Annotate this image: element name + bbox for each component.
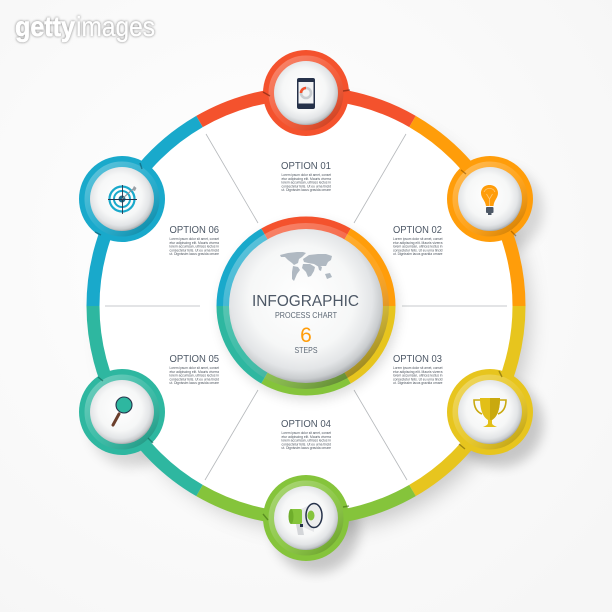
text block: option 02: consectetur felis. Ut eu urna tincid: [393, 248, 442, 252]
text block: option 05: Lorem ipsum dolor sit amet, conset: [170, 366, 219, 370]
text block: option 02: etur adipiscing elit. Mauris viverra: [393, 241, 443, 245]
hub segment: green: [265, 377, 347, 389]
text block: option 06: consectetur felis. Ut eu urna tincid: [170, 248, 219, 252]
ring segment: blue: [93, 122, 200, 306]
text block: option 02: lorem accumsan, ultrices lectus in: [393, 245, 442, 249]
number 6: 6: [300, 324, 312, 347]
icon: target: [108, 185, 137, 214]
text block: option 03: ut. Dignissim lacus gravida ornare: [393, 381, 442, 385]
text block: option 04: ut. Dignissim lacus gravida ornare: [282, 446, 331, 450]
text block: option 05: etur adipiscing elit. Mauris viverra: [170, 370, 219, 374]
drop shadow of the main circle: [89, 105, 543, 573]
central hub: [220, 222, 398, 400]
node 06: target: [79, 156, 165, 242]
icon: magnifying glass: [113, 397, 132, 425]
hub segment: red: [265, 223, 347, 235]
ring segment: orange: [412, 122, 519, 306]
text block: option 04: [281, 418, 331, 450]
text block: option 06: lorem accumsan, ultrices lectus in: [170, 245, 219, 249]
text block: option 01: etur adipiscing elit. Mauris viverra: [282, 177, 331, 181]
node 01: smartphone: [263, 50, 350, 136]
text block: option 05: OPTION 05: [170, 353, 219, 365]
text block: option 03: OPTION 03: [393, 353, 442, 365]
world map icon: [280, 252, 332, 281]
text block: option 05: consectetur felis. Ut eu urna tincid: [170, 377, 219, 381]
text block: option 03: lorem accumsan, ultrices lectus in: [393, 374, 442, 378]
watermark logo: getty: [15, 11, 75, 42]
text block: option 03: etur adipiscing elit. Mauris viverra: [393, 370, 443, 374]
icon: light bulb: [481, 185, 498, 215]
text block: option 02: OPTION 02: [393, 224, 442, 236]
node 03: trophy: [447, 369, 533, 455]
text block: option 01: [281, 160, 331, 192]
title: INFOGRAPHIC: INFOGRAPHIC: [252, 293, 359, 310]
text block: option 04: etur adipiscing elit. Mauris viverra: [282, 435, 331, 439]
hub segment: orange: [347, 235, 388, 306]
text block: option 02: Lorem ipsum dolor sit amet, conset: [393, 237, 442, 241]
hub segment: teal: [224, 306, 265, 377]
node 02: light bulb: [447, 156, 533, 242]
divider lines: [105, 134, 507, 480]
text block: option 04: OPTION 04: [281, 418, 331, 430]
ring segment: teal: [93, 306, 200, 490]
text block: option 04: Lorem ipsum dolor sit amet, conset: [282, 431, 331, 435]
outer ring: [93, 93, 519, 519]
text block: option 01: Lorem ipsum dolor sit amet, conset: [282, 173, 331, 177]
text block: option 06: ut. Dignissim lacus gravida ornare: [170, 252, 219, 256]
node 04: megaphone: [263, 475, 349, 561]
text block: option 01: ut. Dignissim lacus gravida ornare: [282, 188, 331, 192]
text block: option 04: consectetur felis. Ut eu urna tincid: [282, 442, 331, 446]
icon: megaphone: [288, 503, 322, 535]
text block: option 03: [393, 353, 443, 385]
text block: option 01: OPTION 01: [281, 160, 331, 172]
hub segment: yellow: [347, 306, 388, 377]
text block: option 02: ut. Dignissim lacus gravida ornare: [393, 252, 442, 256]
text block: option 05: [170, 353, 219, 385]
ring segment: yellow: [412, 306, 519, 490]
label: STEPS: STEPS: [294, 345, 318, 355]
text block: option 05: ut. Dignissim lacus gravida ornare: [170, 381, 219, 385]
icon: smartphone: [297, 78, 315, 109]
text block: option 01: consectetur felis. Ut eu urna tincid: [282, 184, 331, 188]
text block: option 03: Lorem ipsum dolor sit amet, conset: [393, 366, 442, 370]
subtitle: PROCESS CHART: PROCESS CHART: [275, 310, 337, 320]
text block: option 06: etur adipiscing elit. Mauris viverra: [170, 241, 219, 245]
text block: option 06: [170, 224, 219, 256]
text block: option 04: lorem accumsan, ultrices lectus in: [282, 439, 331, 443]
watermark logo: [15, 11, 155, 42]
ring segment: green: [200, 490, 412, 519]
text block: option 05: lorem accumsan, ultrices lectus in: [170, 374, 219, 378]
text block: option 06: Lorem ipsum dolor sit amet, conset: [170, 237, 219, 241]
text block: option 03: consectetur felis. Ut eu urna tincid: [393, 377, 442, 381]
watermark logo: images: [76, 11, 155, 42]
ring segment: red: [200, 93, 412, 122]
text block: option 02: [393, 224, 443, 256]
hub segment: blue: [224, 235, 265, 306]
node 05: magnifying glass: [79, 369, 165, 455]
text block: option 01: lorem accumsan, ultrices lectus in: [282, 181, 331, 185]
text block: option 06: OPTION 06: [170, 224, 219, 236]
icon: trophy: [474, 398, 506, 427]
central white disc: [93, 93, 519, 519]
